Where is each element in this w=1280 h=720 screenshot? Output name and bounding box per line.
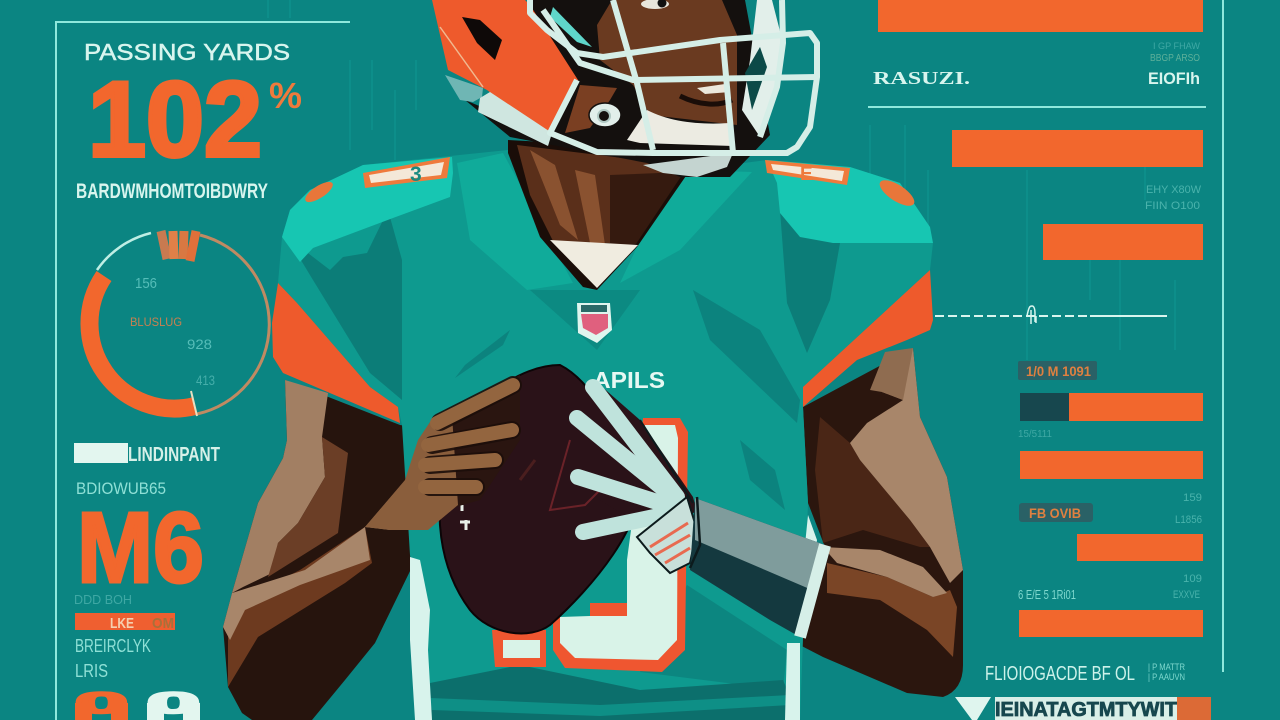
left sleeve stripe [272,283,400,423]
left arm [223,380,445,720]
donut labels: 413 [196,372,215,388]
donut chart [89,231,269,416]
tag 2: FB OVIB [1029,505,1081,521]
white label bar [74,443,128,463]
donut labels [130,275,215,388]
donut labels: 156 [135,275,157,292]
cheek [565,85,617,133]
note 5: 109 [1183,573,1202,585]
donut thick arc [89,276,195,409]
facemask [530,0,817,153]
smile [680,96,732,104]
note 6: 6 E/E 5 1Ri01 [1018,587,1076,602]
panel: passing yards stats [76,39,302,203]
bottom value orange: 0 [75,687,128,720]
donut light arc [97,233,151,270]
orange tag [75,613,175,632]
note 2: FIIN O100 [1145,200,1200,212]
jersey wordmark: APILS [593,367,665,393]
panel: lower left stats [74,443,220,720]
side stripes [410,515,817,720]
bar 6 [1077,534,1203,561]
tag 2 [1019,503,1093,522]
trim [445,75,483,102]
bar 4 with dark segment [1020,393,1203,421]
bottom value white [147,687,200,720]
caption line: BARDWMHOMTOIBDWRY [76,180,268,203]
league badge [577,303,612,343]
right shoulder highlight [767,160,933,243]
donut tick [191,391,197,416]
subheading: BDIOWUB65 [76,479,166,498]
right shoulder number [765,160,850,185]
donut top stripes [161,231,196,261]
orange tag: LKE [110,615,134,632]
big number 102: 102 [88,59,262,179]
small note: I GP FHAW [1153,41,1200,51]
vent [462,17,502,60]
panel: right bar chart [873,0,1211,720]
right helmet shell [742,0,783,137]
illustration: quarterback [223,0,963,720]
small note [1150,41,1200,64]
waveform line [935,306,1167,324]
right sleeve stripe [803,270,933,407]
bar 1 [878,0,1203,32]
big value M6: M6 [77,492,204,604]
undershirt V [550,240,638,288]
note 2 [1145,184,1202,212]
visor [550,7,592,47]
right arm [790,348,963,697]
orange tag: OM [152,615,174,632]
ear clip [589,103,621,127]
footer banner [955,697,1211,720]
label text: LINDINPANT [128,444,220,466]
shell [432,0,578,135]
note 4: 159 [1183,492,1202,504]
collar bands [457,153,752,290]
jersey body [278,150,933,720]
bar 5 [1020,451,1203,479]
mouth guard [627,110,733,146]
caption: BREIRCLYK [75,636,151,656]
note 5 [1173,573,1202,601]
donut labels: BLUSLUG [130,315,182,329]
helmet [432,0,817,177]
left shoulder number: 3 [410,163,422,186]
neck [508,140,690,290]
right shoulder number: E [800,164,813,185]
bar 7 [1019,610,1203,637]
note 2: EHY X80W [1146,184,1202,196]
football [440,365,637,633]
bar 3 [1043,224,1203,260]
face [597,0,737,125]
donut thin arc [197,235,269,414]
footer small note [1148,662,1185,682]
glove [577,385,697,573]
bottom value orange [75,687,128,720]
left hand [365,375,520,530]
left shoulder number [363,157,450,188]
chest number [492,418,688,672]
donut labels: 928 [187,336,212,352]
label left: RASUZI. [873,68,970,88]
wristband [690,497,825,637]
footer small note: | P MATTR [1148,662,1185,672]
footer small note: | P AAUVN [1148,672,1185,682]
bar 2 [952,130,1203,167]
left shoulder highlight [282,157,453,262]
chin strap [643,153,733,177]
tag 1: 1/0 M 1091 [1026,363,1091,379]
note 4 [1175,492,1202,526]
note 3: 15/5111 [1018,429,1052,440]
label right: EIOFIh [1148,69,1200,88]
bottom value white: 0 [147,687,200,720]
shoulder dots [302,175,918,211]
small note: BBGP ARSO [1150,53,1200,64]
note 4: L1856 [1175,514,1202,526]
caption short: LRIS [75,661,108,681]
eye [641,0,669,9]
footer heading: FLIOIOGACDE BF OL [985,663,1135,685]
under-helmet shadow [465,0,770,177]
heading: passing yards: PASSING YARDS [84,39,290,65]
dim caption: DDD BOH [74,592,132,607]
percent sign: % [269,75,302,116]
jersey shading [287,210,840,720]
note 5: EXXVE [1173,589,1200,601]
